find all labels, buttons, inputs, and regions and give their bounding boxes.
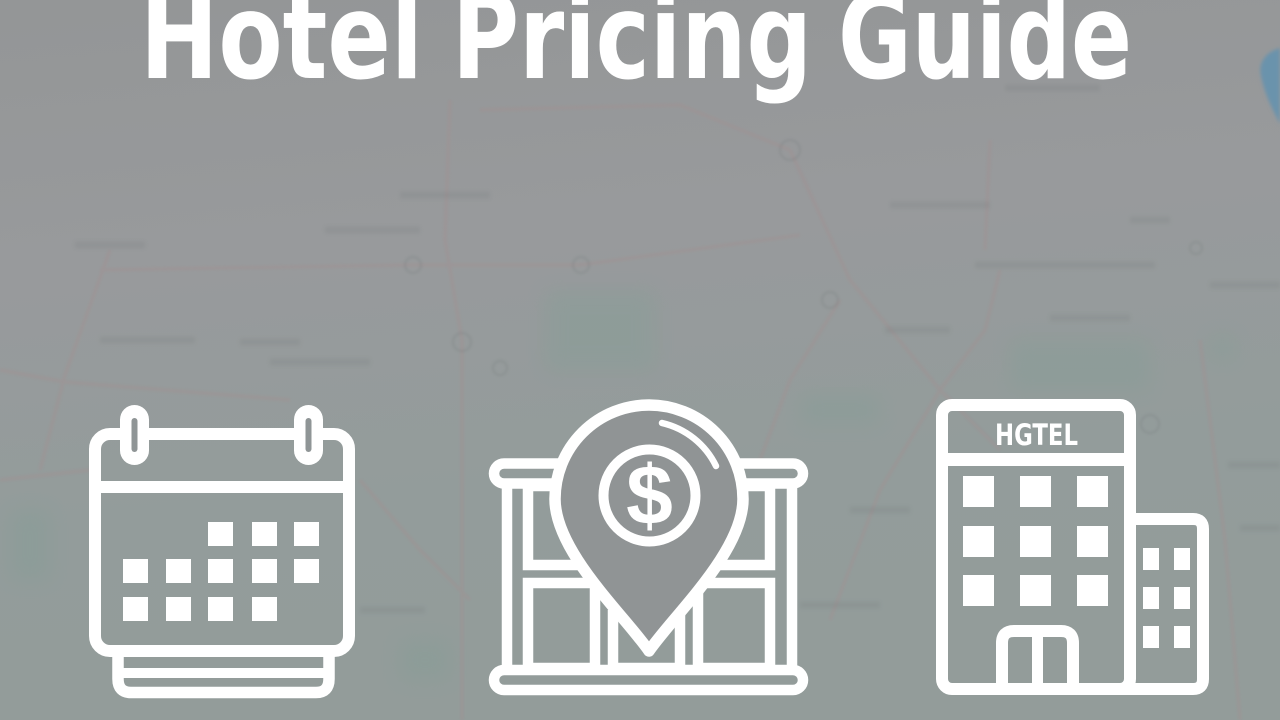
icon: calendar [95,405,349,692]
hotel annex windows [1143,548,1190,648]
title [140,0,1132,107]
hotel tower windows [963,476,1108,606]
calendar body [95,434,349,651]
hotel annex [1130,519,1203,689]
dollar coin [604,448,696,542]
hotel main tower [942,405,1145,689]
icon: building with price location pin [494,405,803,690]
calendar date squares [123,522,319,621]
calendar binder rings [120,405,323,465]
pin highlight arc [662,423,716,466]
hotel entrance doors [1002,631,1073,689]
water patch in the top-right corner [1260,48,1280,124]
location pin [555,405,743,651]
dollar coin: $ [626,448,673,542]
building outline [494,464,803,690]
hotel sign: HGTEL [995,418,1078,452]
calendar lower pages [118,655,329,692]
icon: hotel building [942,405,1203,689]
